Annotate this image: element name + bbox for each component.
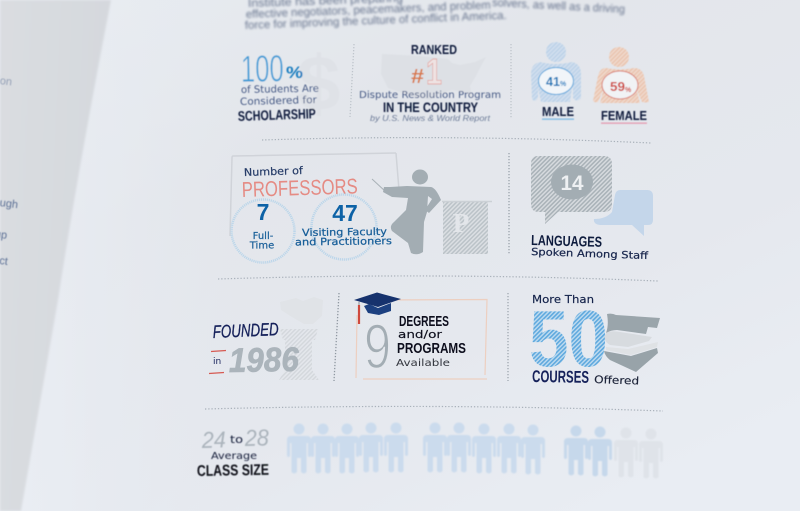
heading: number of professors: PROFESSORS	[241, 174, 358, 202]
scholarship caption	[238, 84, 319, 124]
founded year: 1986	[228, 341, 300, 380]
class size range: 28	[244, 424, 269, 451]
big fifty: 50	[529, 294, 608, 383]
panel: languages	[531, 156, 653, 262]
hash one: 1	[426, 51, 442, 92]
class size label: CLASS SIZE	[197, 462, 269, 480]
divider	[334, 293, 339, 381]
panel: founded	[209, 297, 323, 380]
ranked label: RANKED	[411, 43, 457, 57]
professors box	[230, 153, 396, 236]
panel: courses	[529, 294, 660, 388]
icon: female figure	[593, 47, 649, 103]
faded people	[614, 428, 663, 478]
icon: professor figure	[383, 170, 441, 254]
hash one	[411, 51, 442, 92]
scholarship caption: SCHOLARSHIP	[238, 105, 316, 124]
courses caption: Offered	[594, 374, 639, 388]
people group two	[423, 422, 545, 474]
degrees caption: PROGRAMS	[397, 341, 466, 357]
percent badge	[538, 68, 574, 94]
icon: handshake	[280, 297, 323, 324]
average label: Average	[211, 451, 257, 462]
people group three	[564, 426, 612, 476]
intro paragraph: effective negotiators, peacemakers, and problem	[246, 0, 491, 21]
class size range: to	[230, 434, 243, 446]
visiting faculty circle: Visiting Faculty	[302, 227, 387, 239]
ranking caption	[359, 90, 501, 123]
divider	[508, 153, 510, 255]
scholarship caption: Considered for	[240, 95, 318, 108]
left page text fragments	[0, 74, 19, 268]
icon: dollar sign: $	[297, 39, 340, 127]
panel: professors	[230, 153, 492, 262]
intro paragraph	[245, 0, 625, 32]
icon: male figure	[531, 42, 581, 102]
hash one: #	[411, 66, 424, 88]
percent badge: %	[560, 81, 567, 88]
row dividers	[205, 138, 663, 411]
icon: blue speech bubble	[594, 190, 653, 236]
panel: male share	[531, 42, 581, 120]
icon: USA map	[381, 54, 486, 100]
icon: pillar	[279, 329, 319, 380]
people group one	[287, 422, 408, 474]
visiting faculty circle: and Practitioners	[295, 236, 392, 248]
panel: class size label	[197, 424, 269, 480]
degrees box	[356, 300, 487, 379]
male label: MALE	[542, 104, 574, 119]
pictogram: class size people	[287, 422, 663, 478]
percent badge: %	[625, 87, 632, 94]
intro paragraph: force for improving the culture of conflict in America.	[245, 10, 507, 32]
icon: pointer	[372, 179, 385, 191]
founded heading: FOUNDED	[212, 319, 279, 342]
languages caption: Spoken Among Staff	[531, 247, 649, 262]
100 percent figure: 100	[240, 48, 284, 91]
ranking caption: by U.S. News & World Report	[370, 113, 491, 123]
icon: stacked books	[604, 314, 660, 372]
panel: female share	[593, 47, 649, 124]
percent badge	[602, 71, 638, 99]
courses caption: COURSES	[532, 367, 589, 387]
panel: ranked number one	[359, 43, 501, 123]
heading: number of professors	[241, 165, 358, 202]
panel: scholarship	[238, 39, 340, 127]
icon: hatched speech bubble	[531, 156, 612, 224]
full-time circle	[232, 199, 294, 262]
big nine: 9	[364, 312, 391, 382]
icon: graduation cap	[354, 292, 401, 324]
percent badge: 41	[546, 74, 560, 89]
founded year: in	[213, 357, 221, 367]
scholarship caption: of Students Are	[241, 84, 319, 96]
visiting faculty circle: 47	[332, 200, 358, 226]
percent badge: 59	[610, 79, 625, 94]
female label: FEMALE	[601, 108, 647, 123]
class size range	[201, 424, 269, 453]
100 percent figure: %	[286, 63, 303, 82]
class size range: 24	[201, 426, 226, 453]
divider	[510, 44, 512, 118]
degrees caption	[396, 314, 466, 369]
icon: podium	[442, 202, 492, 254]
more than label: More Than	[532, 294, 594, 306]
divider	[507, 293, 509, 381]
divider	[350, 44, 354, 117]
language count badge: 14	[560, 172, 584, 195]
degrees caption: Available	[396, 358, 450, 369]
panel: degrees	[354, 292, 487, 382]
degrees caption: and/or	[398, 329, 443, 341]
icon: podium: P	[453, 208, 469, 238]
ranking caption: Dispute Resolution Program	[359, 90, 501, 101]
full-time circle: Time	[249, 240, 274, 252]
languages caption	[531, 233, 649, 262]
visiting faculty circle	[295, 194, 392, 260]
ranking caption: IN THE COUNTRY	[383, 100, 478, 115]
languages caption: LANGUAGES	[531, 233, 603, 251]
degrees caption: DEGREES	[399, 314, 449, 330]
heading: number of professors: Number of	[244, 165, 303, 179]
full-time circle: Full-	[253, 231, 274, 242]
full-time circle: 7	[257, 199, 269, 225]
